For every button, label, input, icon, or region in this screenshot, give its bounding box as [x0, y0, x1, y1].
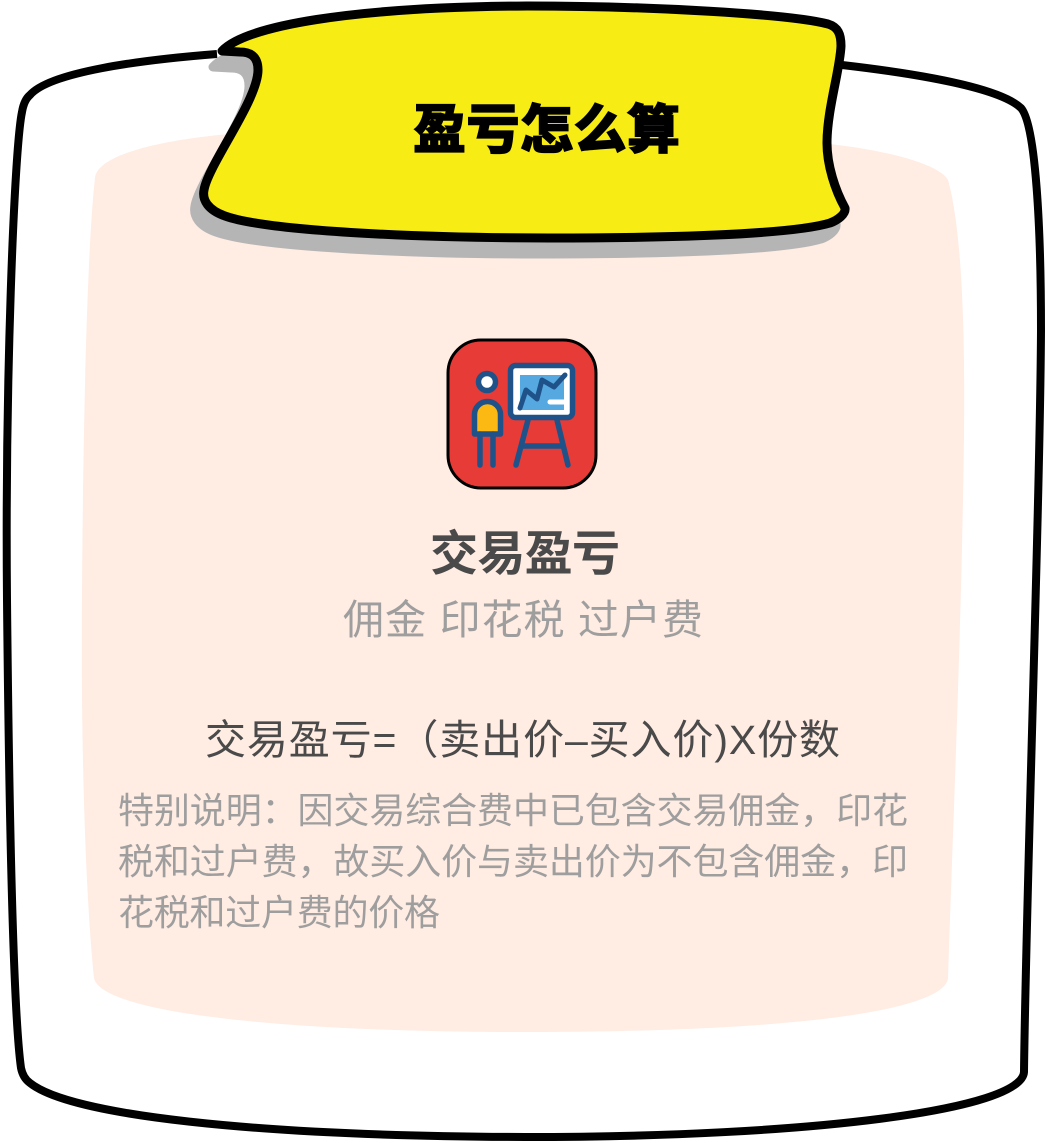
note paragraph	[118, 790, 908, 933]
heading: 交易盈亏: 交易盈亏	[430, 528, 620, 581]
subtitle: fee items: 佣金 印花税 过户费	[343, 597, 703, 643]
banner: yellow title ribbon	[204, 6, 845, 238]
note paragraph: 税和过户费，故买入价与卖出价为不包含佣金，印	[118, 841, 908, 882]
panel: peach background	[82, 134, 964, 1032]
formula: 交易盈亏=（卖出价–买入价)X份数	[205, 717, 840, 763]
banner shadow	[195, 22, 836, 254]
note paragraph: 花税和过户费的价格	[118, 892, 440, 933]
note paragraph: 特别说明：因交易综合费中已包含交易佣金，印花	[118, 790, 908, 831]
title: 盈亏怎么算	[413, 101, 680, 160]
icon: presenter with chart board	[448, 340, 596, 488]
